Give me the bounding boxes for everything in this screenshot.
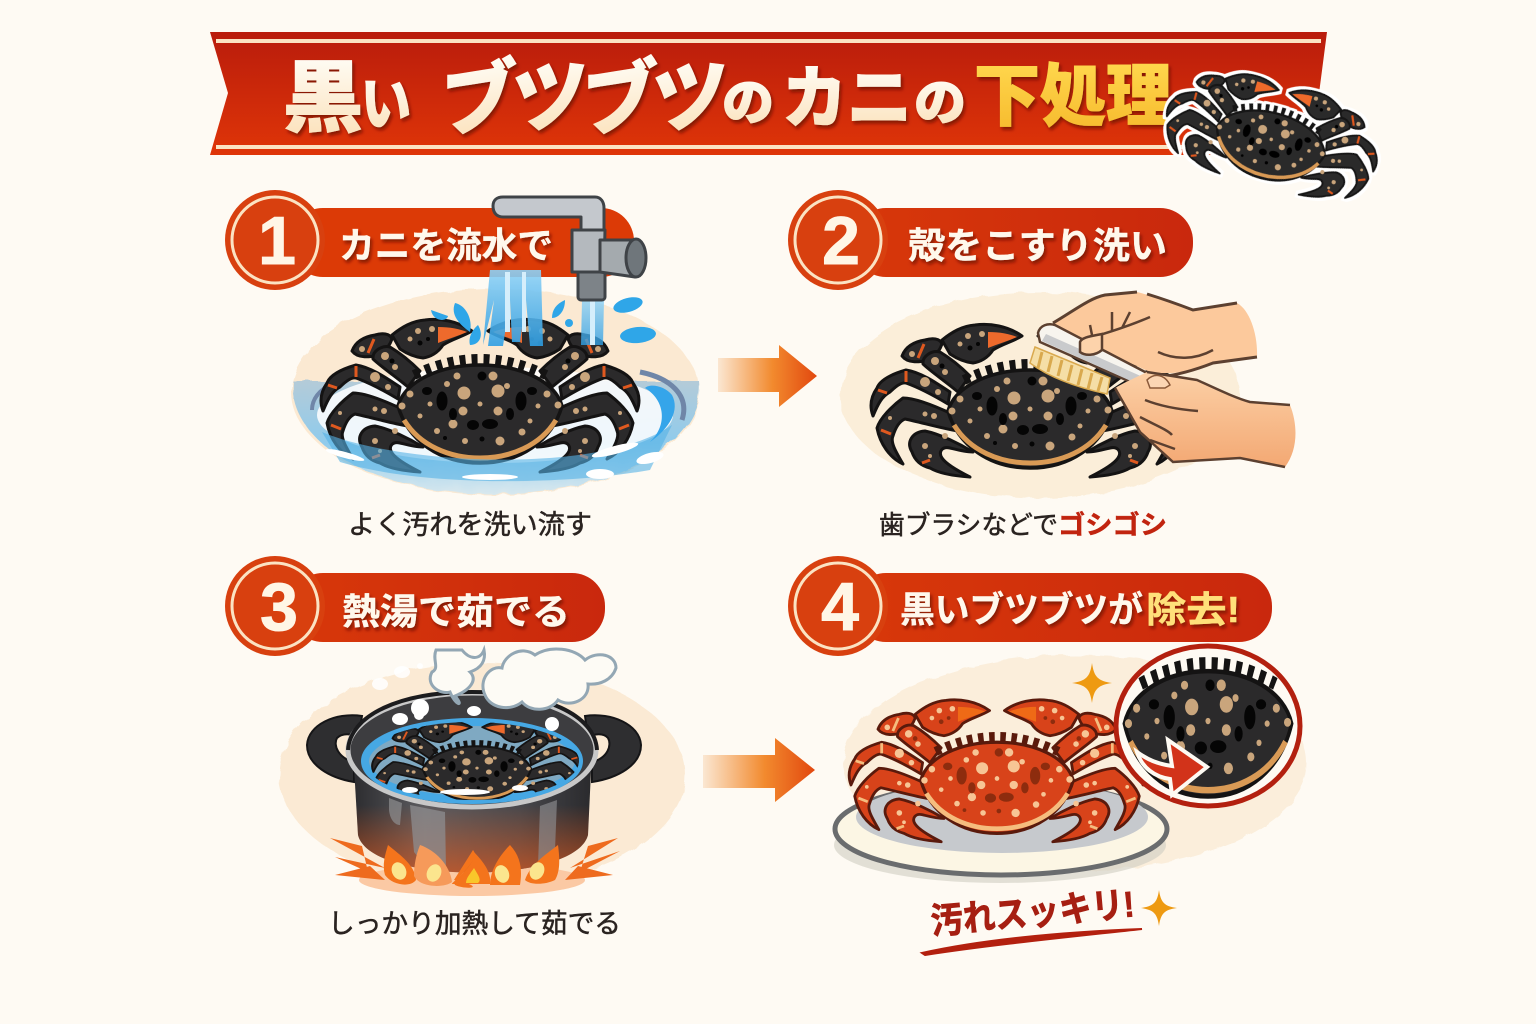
red crab	[849, 700, 1145, 842]
title text: ブ	[582, 52, 658, 149]
sparkle	[1072, 663, 1112, 703]
icon: steam	[430, 649, 616, 709]
step 4 heading: 除去!	[1146, 589, 1240, 630]
icon: upper hand	[1053, 292, 1257, 377]
backdrop blob	[840, 292, 1240, 498]
icon: plate	[834, 781, 1167, 883]
crab	[871, 324, 1189, 477]
backdrop blob	[291, 289, 699, 495]
title text: ツ	[652, 50, 728, 147]
icon: pot	[307, 692, 641, 872]
step 1 heading	[225, 190, 634, 290]
icon: title crab	[1155, 56, 1390, 212]
step 2 caption: 歯ブラシなどで	[879, 510, 1058, 540]
step 2 heading	[788, 190, 1193, 290]
arrow 3 to 4	[703, 738, 815, 802]
step 3 heading: 熱湯で茹でる	[342, 591, 570, 632]
title text: 黒	[283, 54, 363, 142]
step 1 heading: 1	[258, 203, 296, 279]
step 4 heading: 黒いブツブツが	[900, 589, 1143, 630]
step 1 caption: よく汚れを洗い流す	[348, 510, 592, 540]
backdrop blob	[279, 663, 685, 887]
step 2 heading: 殻をこすり洗い	[908, 225, 1167, 266]
title text: の	[914, 75, 966, 131]
crab	[321, 319, 639, 472]
crab in pot	[372, 721, 582, 806]
bubbles	[372, 663, 559, 795]
title text: ツ	[512, 50, 588, 147]
title text: 下処理	[974, 59, 1172, 135]
icon: lower hand	[1115, 372, 1295, 467]
title text: い	[361, 71, 411, 138]
water streams	[483, 270, 604, 346]
step 1 illustration: crab under running water	[291, 197, 699, 495]
backdrop blob	[843, 655, 1307, 871]
arrow 1 to 2	[718, 345, 817, 407]
step 2 heading: 2	[822, 203, 860, 279]
step 2 illustration: brushing the crab	[840, 292, 1295, 498]
title text: カニ	[782, 61, 912, 137]
step 3 illustration: pot on fire	[279, 649, 685, 896]
callout: zoomed shell	[1116, 646, 1300, 806]
step 3 heading	[225, 556, 605, 656]
step 4 illustration: boiled crab on plate	[834, 646, 1307, 883]
step 3 heading: 3	[260, 569, 298, 645]
step 4 heading: 4	[821, 569, 859, 645]
title banner	[210, 32, 1327, 155]
title text: の	[722, 75, 774, 131]
title text: ブ	[441, 52, 517, 149]
step 3 caption: しっかり加熱して茹でる	[328, 909, 621, 939]
icon: faucet	[493, 197, 646, 300]
step 2 caption: ゴシゴシ	[1058, 510, 1167, 540]
water ripples	[322, 386, 675, 481]
step 1 heading: カニを流水で	[339, 225, 553, 266]
icon: brush	[1030, 324, 1147, 394]
glow and flame spikes	[330, 838, 620, 896]
callout: clean result: 汚れスッキリ!	[929, 883, 1136, 942]
step 4 heading	[788, 556, 1272, 656]
title text	[283, 50, 1172, 149]
icon: flames	[384, 845, 559, 888]
water droplets	[431, 294, 657, 345]
